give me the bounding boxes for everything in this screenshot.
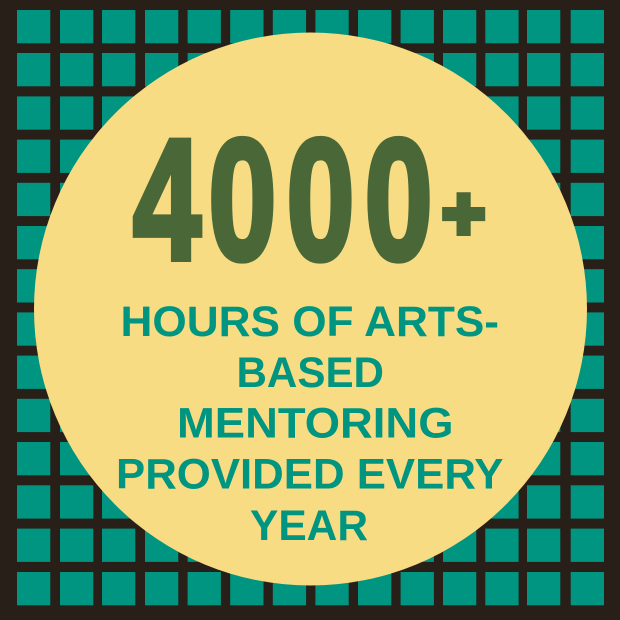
yellow circle	[34, 32, 587, 586]
line 4: PROVIDED EVERY	[116, 450, 504, 498]
line 2: BASED	[236, 349, 384, 397]
big number: 4000+: 4000	[133, 103, 433, 296]
line 5: YEAR	[250, 502, 368, 550]
big number: 4000+: +	[442, 172, 485, 255]
description text	[116, 298, 504, 550]
line 1: HOURS OF ARTS-	[120, 298, 499, 346]
line 3: MENTORING	[177, 400, 454, 448]
